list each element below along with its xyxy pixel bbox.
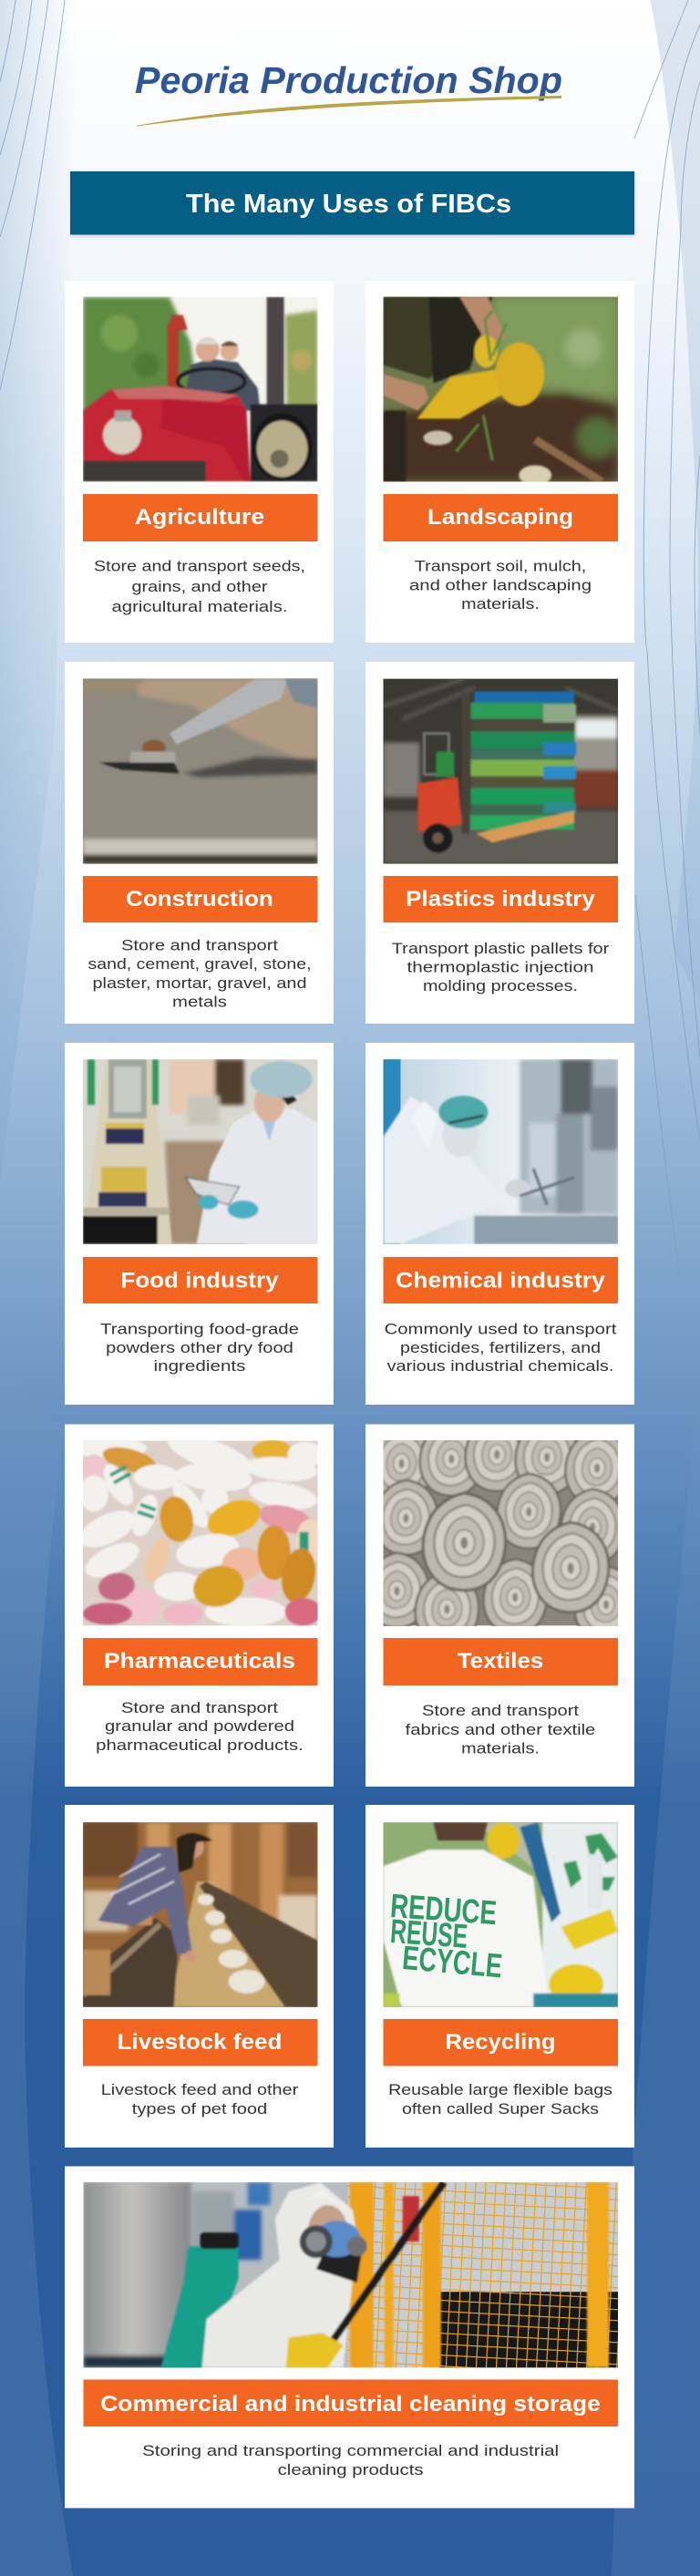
label bar (383, 494, 618, 541)
logo: Peoria Production Shop: Peoria Production Shop (135, 59, 562, 101)
description: metals (172, 994, 227, 1011)
panel: livestock feed (65, 1805, 334, 2148)
label bar (383, 1257, 618, 1303)
description: sand, cement, gravel, stone, (88, 956, 312, 973)
label bar: Livestock feed (118, 2030, 282, 2055)
label bar (383, 1638, 618, 1685)
title banner (70, 171, 635, 237)
label bar (83, 1257, 317, 1303)
description (100, 1321, 299, 1375)
description: Transport soil, mulch, (415, 559, 586, 575)
panel: recycling (365, 1805, 634, 2148)
description: Store and transport (422, 1703, 580, 1719)
panel: plastics industry (365, 662, 634, 1024)
panel: commercial and industrial cleaning storage (65, 2166, 634, 2509)
description: Commonly used to transport (385, 1321, 617, 1337)
photo: gloved hands with plant (383, 297, 618, 481)
description: materials. (461, 596, 540, 613)
description: Store and transport seeds, (94, 559, 305, 575)
description: pesticides, fertilizers, and (400, 1340, 601, 1356)
photo: recycling t-shirt: REUSE (389, 1912, 468, 1955)
photo: worker spraying disinfectant (84, 2182, 618, 2368)
description (94, 559, 305, 615)
photo: pills and capsules (83, 1440, 317, 1626)
description: molding processes. (423, 978, 578, 994)
description: various industrial chemicals. (387, 1358, 613, 1375)
photo: farmer feeding sheep (83, 1822, 317, 2007)
panel: agriculture (65, 281, 334, 643)
photo: recycling t-shirt: REDUCE (389, 1887, 498, 1932)
description: grains, and other (131, 579, 268, 595)
description: and other landscaping (409, 577, 592, 593)
description (101, 2082, 299, 2117)
panel: textiles (365, 1417, 638, 1787)
description: Reusable large flexible bags (388, 2082, 612, 2098)
panel: construction (65, 662, 334, 1024)
description: often called Super Sacks (402, 2101, 599, 2117)
label bar: Agriculture (135, 505, 264, 530)
description: granular and powdered (105, 1718, 294, 1735)
description: Storing and transporting commercial and industrial (142, 2443, 559, 2459)
description: Transporting food-grade (100, 1321, 299, 1337)
description (392, 941, 610, 994)
description: materials. (461, 1741, 540, 1757)
description: powders other dry food (106, 1340, 293, 1356)
description: Livestock feed and other (101, 2082, 299, 2098)
label bar: Recycling (445, 2030, 556, 2055)
photo: recycling t-shirt (383, 1822, 618, 2007)
description: Store and transport (121, 1700, 279, 1716)
photo: food line inspector (83, 1059, 317, 1244)
photo: forklift with plastic crates (383, 678, 618, 864)
panel: chemical industry (365, 1043, 634, 1405)
description: plaster, mortar, gravel, and (93, 975, 306, 992)
description: Store and transport (121, 937, 279, 953)
label bar: Pharmaceuticals (104, 1649, 295, 1674)
label bar: Commercial and industrial cleaning storage (100, 2392, 601, 2416)
photo: rolled fabric (383, 1440, 618, 1626)
photo: worker smoothing concrete (83, 678, 317, 864)
panel: pharmaceuticals (65, 1424, 334, 1787)
label bar (83, 494, 317, 541)
logo: Peoria Production Shop (135, 59, 562, 126)
description (385, 1321, 617, 1375)
description (88, 937, 312, 1011)
label bar: Construction (126, 887, 273, 912)
photo: tractor (83, 297, 317, 481)
description: ingredients (153, 1358, 246, 1375)
description (406, 1703, 595, 1757)
label bar: Food industry (120, 1269, 279, 1293)
description: Transport plastic pallets for (392, 941, 610, 957)
description (142, 2443, 559, 2478)
description: thermoplastic injection (407, 959, 594, 975)
label bar (84, 2379, 618, 2427)
label bar: Chemical industry (396, 1269, 606, 1293)
photo: recycling t-shirt: ECYCLE (401, 1939, 504, 1984)
description: cleaning products (278, 2462, 424, 2478)
label bar (83, 2019, 317, 2066)
label bar: Landscaping (427, 505, 573, 530)
label bar (83, 1638, 317, 1685)
label bar (383, 2019, 618, 2066)
panel: landscaping (365, 281, 634, 643)
label bar (383, 876, 618, 922)
description (388, 2082, 612, 2117)
label bar (83, 876, 317, 922)
description: types of pet food (132, 2101, 267, 2117)
description (409, 559, 592, 613)
description: pharmaceutical products. (96, 1737, 304, 1754)
panel: food industry (65, 1043, 334, 1405)
title banner: The Many Uses of FIBCs (186, 190, 511, 219)
description: agricultural materials. (111, 599, 288, 615)
description: fabrics and other textile (406, 1722, 595, 1738)
label bar: Textiles (458, 1649, 543, 1674)
label bar: Plastics industry (406, 887, 595, 912)
description (96, 1700, 304, 1754)
photo: lab worker at machine (383, 1059, 618, 1244)
